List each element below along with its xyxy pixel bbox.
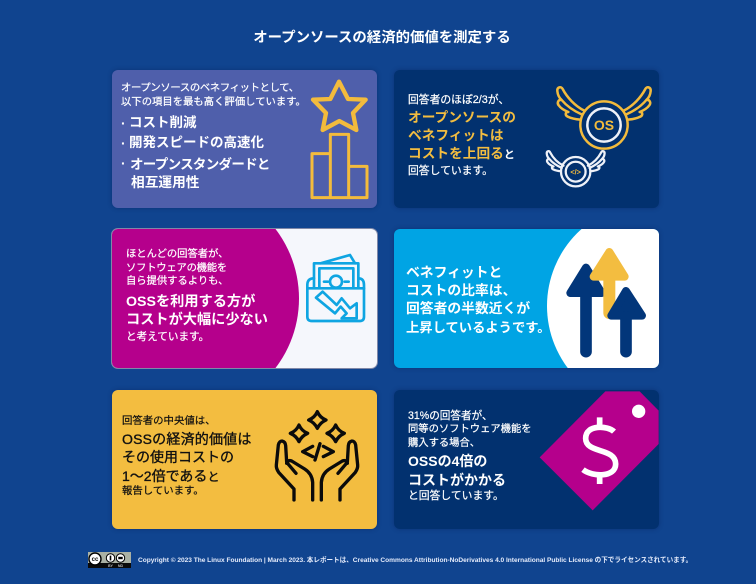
icon: creative commons badge: ND <box>118 564 123 568</box>
text block: benefits list: オープンスタンダードと <box>130 157 270 172</box>
icon: creative commons badge: cc <box>92 557 99 563</box>
icon: creative commons badge: BY <box>108 564 113 568</box>
panel: benefit to cost ratio <box>394 229 659 368</box>
purple circular background <box>70 184 299 412</box>
icon: price tag with dollar sign <box>540 391 659 510</box>
text block: 31 percent statement: 購入する場合、 <box>408 438 480 449</box>
text block: 31 percent statement: 同等のソフトウェア機能を <box>408 424 532 435</box>
text block: 31 percent statement: OSSの4倍の <box>408 453 487 469</box>
text block: benefits list: 相互運用性 <box>131 175 199 190</box>
text block: benefits list: · <box>121 155 126 171</box>
text block: median statement <box>122 414 252 497</box>
icon: winged coins: </> <box>570 167 581 176</box>
icon: rising arrows <box>566 248 646 358</box>
text block: ratio statement: コストの比率は、 <box>406 283 516 298</box>
text block: two thirds statement: 回答者のほぼ2/3が、 <box>408 94 509 106</box>
text block: two thirds statement <box>408 93 516 177</box>
text block: benefits list: オープンソースのベネフィットとして、 <box>121 83 299 94</box>
icon: winged coins <box>546 86 652 188</box>
icon: creative commons badge <box>88 552 131 568</box>
panel: four times the cost <box>394 390 659 529</box>
text block: benefits list <box>121 82 306 190</box>
text block: benefits list: 以下の項目を最も高く評価しています。 <box>121 97 306 108</box>
text block: benefits list: 開発スピードの高速化 <box>129 135 264 150</box>
text block: benefits list: · <box>121 115 126 131</box>
text block: median statement: OSSの経済的価値は <box>122 431 252 447</box>
text block: benefits list: コスト削減 <box>129 115 196 130</box>
icon: wallet with falling cost <box>306 254 366 322</box>
panel: top benefits <box>112 70 377 208</box>
panel: median economic value <box>112 390 377 529</box>
text block: two thirds statement: オープンソースの <box>408 110 516 125</box>
text block: median statement: 報告しています。 <box>122 486 204 497</box>
text block: cost statement: コストが大幅に少ない <box>126 312 268 328</box>
panel: benefits exceed costs <box>394 70 659 208</box>
text block: ratio statement <box>406 265 551 335</box>
text block: cost statement: ほとんどの回答者が、 <box>126 249 228 260</box>
text block: two thirds statement: コストを上回ると <box>408 146 515 161</box>
text block: ratio statement: ベネフィットと <box>406 265 502 280</box>
icon: hands holding code <box>274 410 360 502</box>
text block: 31 percent statement: と回答しています。 <box>408 490 504 502</box>
text block: ratio statement: 回答者の半数近くが <box>406 301 530 316</box>
text block: median statement: 回答者の中央値は、 <box>122 416 216 427</box>
text block: 31 percent statement: コストがかかる <box>408 472 506 488</box>
text block: cost statement <box>126 248 268 343</box>
panel: OSS cheaper than self-provision <box>112 229 377 368</box>
icon: winged coins: OS <box>594 117 614 133</box>
text block: cost statement: 自ら提供するよりも、 <box>126 276 228 287</box>
icon: star on podium <box>310 80 368 200</box>
text block: 31 percent statement <box>408 409 532 502</box>
text block: cost statement: OSSを利用する方が <box>126 294 255 310</box>
text block: two thirds statement: ベネフィットは <box>408 128 504 143</box>
text block: two thirds statement: 回答しています。 <box>408 165 493 177</box>
text block: ratio statement: 上昇しているようです。 <box>406 320 551 335</box>
title: オープンソースの経済的価値を測定する <box>253 30 511 46</box>
footer: copyright notice: Copyright © 2023 The Linux Foundation | March 2023. 本レポートは、Creative Commons Attribution-NoDerivatives 4.0 International Public License の下でライセンスされています。 <box>138 557 692 564</box>
text block: cost statement: ソフトウェアの機能を <box>126 263 227 274</box>
text block: median statement: その使用コストの <box>122 449 234 465</box>
text block: median statement: 1～2倍であると <box>122 468 219 484</box>
white circular background <box>547 203 753 409</box>
text block: 31 percent statement: 31%の回答者が、 <box>408 410 493 422</box>
text block: cost statement: と考えています。 <box>126 331 209 343</box>
text block: benefits list: · <box>121 135 126 151</box>
